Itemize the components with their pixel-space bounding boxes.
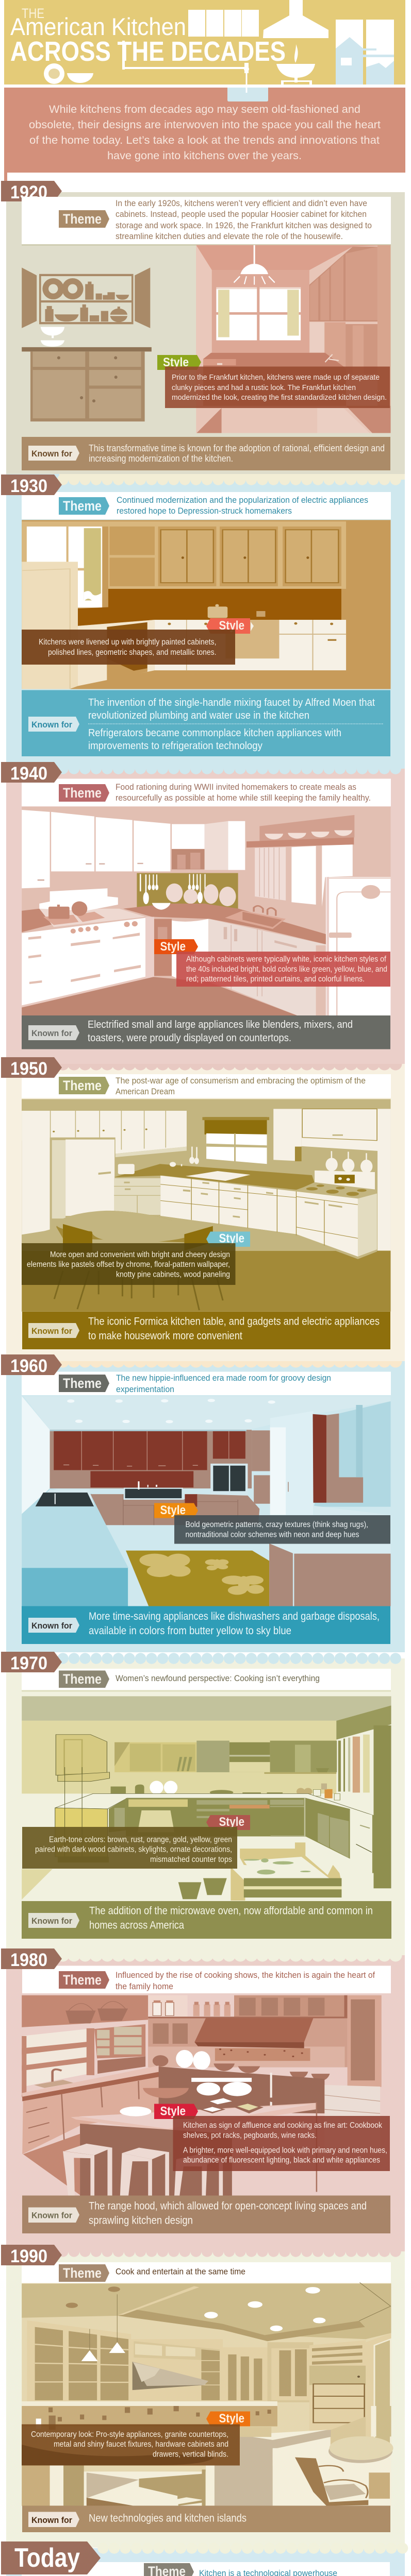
style tag: Style bbox=[160, 940, 186, 954]
known for label: Known for bbox=[31, 720, 72, 730]
style tag bbox=[154, 1503, 198, 1518]
known for label bbox=[28, 1913, 79, 1928]
known for band bbox=[22, 1312, 390, 1349]
style text box: Earth-tone colors: brown, rust, orange, gold, yellow, green bbox=[49, 1835, 232, 1844]
style tag: Style bbox=[219, 2412, 244, 2426]
style text box: mismatched counter tops bbox=[150, 1855, 232, 1864]
icon: range hood bbox=[263, 0, 328, 38]
year tag 1990: 1990 bbox=[10, 2246, 47, 2266]
theme text: The new hippie-influenced era made room for groovy design bbox=[116, 1373, 331, 1383]
panel: 1980 bbox=[1, 1939, 405, 2251]
theme text: restored hope to Depression-struck homemakers bbox=[117, 506, 292, 516]
panel: 1940 bbox=[1, 762, 405, 1060]
scallop edge bbox=[63, 1057, 405, 1071]
known for text: The addition of the microwave oven, now affordable and common in bbox=[89, 1905, 373, 1917]
theme text bbox=[116, 782, 371, 803]
known for label bbox=[28, 717, 79, 732]
theme text: cabinets. Instead, people used the popular Hoosier cabinet for kitchen bbox=[116, 210, 367, 219]
style text box bbox=[165, 367, 390, 408]
year tag 1970 bbox=[1, 1652, 62, 1673]
panel: 1970 bbox=[1, 1652, 405, 1950]
style text box: Prior to the Frankfurt kitchen, kitchens were made up of separate bbox=[172, 374, 380, 382]
known for text bbox=[88, 697, 384, 752]
known for text: homes across America bbox=[89, 1920, 184, 1931]
known for label: Known for bbox=[31, 449, 72, 459]
illustration: 1950s kitchen bbox=[22, 1099, 391, 1312]
style text box: Although cabinets were typically white, iconic kitchen styles of bbox=[186, 955, 387, 963]
style text box: Kitchens were livened up with brightly painted cabinets, bbox=[39, 638, 217, 647]
style text box: the 40s included bright, bold colors like green, yellow, blue, and bbox=[186, 965, 387, 974]
theme tag: Theme bbox=[63, 2265, 102, 2281]
theme text: The post-war age of consumerism and embracing the optimism of the bbox=[116, 1076, 366, 1086]
known for text: revolutionized plumbing and water use in the kitchen bbox=[88, 709, 309, 721]
title: ACROSS THE DECADES bbox=[10, 36, 286, 67]
panel: today bbox=[1, 2541, 405, 2576]
theme tag: Theme bbox=[63, 1376, 102, 1391]
style tag: Style bbox=[160, 1503, 186, 1517]
style tag bbox=[206, 618, 254, 634]
known for text: The range hood, which allowed for open-concept living spaces and bbox=[89, 2200, 367, 2212]
year tag 1980 bbox=[1, 1948, 62, 1970]
theme text: streamline kitchen duties and elevate the role of the housewife. bbox=[116, 232, 343, 241]
style text box: abundance of fluorescent lighting, black and white appliances bbox=[183, 2156, 380, 2165]
known for band bbox=[22, 690, 390, 756]
style text box: knotty pine cabinets, wood paneling bbox=[116, 1270, 230, 1279]
known for text: to make housework more convenient bbox=[88, 1330, 242, 1342]
known for text: increasing modernization of the kitchen. bbox=[89, 453, 233, 464]
style tag bbox=[206, 1231, 250, 1247]
style text box: shelves, pot racks, pegboards, wine racks. bbox=[183, 2131, 317, 2140]
style text box bbox=[176, 952, 390, 987]
known for band bbox=[22, 2196, 390, 2233]
known for text bbox=[88, 1019, 353, 1044]
style tag: Style bbox=[163, 355, 189, 369]
illustration: 1920s kitchen bbox=[196, 245, 391, 433]
year tag 1950 bbox=[1, 1057, 62, 1079]
year tag 1920: 1920 bbox=[10, 182, 47, 202]
theme panel bbox=[22, 779, 391, 806]
scallop edge bbox=[63, 2246, 405, 2257]
intro text: obsolete, their designs are interwoven into the space you call the heart bbox=[29, 118, 381, 131]
intro text: of the home today. Let’s take a look at the trends and innovations that bbox=[29, 134, 380, 146]
known for text: available in colors from butter yellow to sky blue bbox=[89, 1625, 291, 1637]
intro panel bbox=[4, 84, 405, 183]
known for text: toasters, were proudly displayed on countertops. bbox=[88, 1032, 291, 1044]
theme tag: Theme bbox=[63, 785, 102, 801]
year tag 1930: 1930 bbox=[10, 476, 47, 496]
title: American Kitchen bbox=[10, 13, 186, 40]
intro text bbox=[29, 103, 381, 162]
style text box: More open and convenient with bright and cheery design bbox=[50, 1250, 230, 1259]
known for label: Known for bbox=[31, 1621, 72, 1631]
known for label: Known for bbox=[31, 1326, 72, 1336]
theme tag: Theme bbox=[63, 1972, 102, 1988]
icon: pot on burner bbox=[276, 44, 315, 84]
style text box bbox=[22, 630, 235, 665]
style tag bbox=[206, 2411, 250, 2427]
style text box: red; patterned tiles, printed curtains, and colorful linens. bbox=[186, 975, 365, 984]
known for label bbox=[28, 1618, 79, 1633]
known for text bbox=[88, 1316, 380, 1342]
style tag: Style bbox=[160, 2104, 186, 2119]
theme text: resourcefully as possible at home while still keeping the family healthy. bbox=[116, 793, 371, 803]
known for text: New technologies and kitchen islands bbox=[89, 2512, 246, 2524]
theme panel bbox=[22, 1669, 391, 1692]
theme text: Cook and entertain at the same time bbox=[116, 2267, 245, 2276]
theme text: the family home bbox=[116, 1981, 173, 1991]
style tag bbox=[157, 355, 201, 370]
icon: faucet pipe bbox=[122, 41, 249, 88]
style text box: paired with dark wood cabinets, skylights, ornate decorations, bbox=[35, 1845, 232, 1854]
title: THE bbox=[22, 6, 44, 21]
illustration: 1960s kitchen bbox=[22, 1395, 391, 1606]
style text box bbox=[173, 2116, 390, 2171]
style text box: metal and shiny faucet fixtures, hardware cabinets and bbox=[54, 2440, 228, 2449]
known for band bbox=[22, 437, 390, 470]
theme tag: Theme bbox=[63, 211, 102, 227]
year tag 1950: 1950 bbox=[10, 1059, 47, 1079]
illustration: 1940s kitchen bbox=[22, 807, 391, 1015]
icon: window with house bbox=[336, 20, 394, 84]
panel: 1950 bbox=[1, 1057, 405, 1355]
style text box: modernized the look, creating the first standardized kitchen design. bbox=[172, 394, 387, 402]
style tag bbox=[154, 939, 198, 954]
theme text: Food rationing during WWII invited homemakers to create meals as bbox=[116, 782, 356, 792]
known for label: Known for bbox=[31, 2210, 72, 2221]
style tag: Style bbox=[219, 619, 244, 633]
known for text: sprawling kitchen design bbox=[89, 2214, 193, 2227]
scallop edge bbox=[63, 1355, 405, 1367]
style text box: elements like pastels offset by chrome, floral-pattern wallpaper, bbox=[27, 1260, 230, 1269]
style text box: polished lines, geometric shapes, and metallic tones. bbox=[48, 648, 217, 657]
style text box: nontraditional color schemes with neon and deep hues bbox=[186, 1530, 359, 1539]
illustration: 1990s kitchen bbox=[22, 2282, 393, 2506]
theme text: experimentation bbox=[116, 1384, 174, 1394]
theme text: Influenced by the rise of cooking shows, the kitchen is again the heart of bbox=[116, 1970, 375, 1980]
theme tag: Theme bbox=[63, 498, 102, 514]
year tag 1940 bbox=[1, 762, 62, 784]
style text box bbox=[22, 1827, 237, 1869]
illustration: 1930s kitchen bbox=[22, 520, 391, 689]
year tag 1970: 1970 bbox=[10, 1653, 47, 1673]
theme text: In the early 1920s, kitchens weren’t very efficient and didn’t even have bbox=[116, 199, 367, 208]
style tag bbox=[206, 1815, 250, 1830]
style text box: A brighter, more well-equipped look with primary and neon hues, bbox=[183, 2146, 387, 2155]
style tag: Style bbox=[219, 1815, 244, 1829]
theme text bbox=[116, 199, 372, 241]
known for text bbox=[89, 443, 385, 464]
style text box: Kitchen as sign of affluence and cooking as fine art: Cookbook bbox=[183, 2121, 382, 2130]
year tag 1930 bbox=[1, 474, 62, 496]
known for label: Known for bbox=[31, 1916, 72, 1926]
theme text bbox=[117, 495, 368, 516]
known for text: Refrigerators became commonplace kitchen appliances with bbox=[88, 727, 341, 739]
theme text: Women’s newfound perspective: Cooking isn’t everything bbox=[116, 1673, 320, 1683]
icon: water basin bbox=[227, 88, 268, 101]
intro text: have gone into kitchens over the years. bbox=[107, 149, 302, 162]
theme panel bbox=[22, 2562, 390, 2576]
style tag: Style bbox=[219, 1231, 244, 1246]
year tag today: Today bbox=[14, 2543, 80, 2573]
panel: 1960 bbox=[1, 1349, 405, 1652]
theme text bbox=[116, 1076, 366, 1096]
style text box bbox=[174, 1515, 390, 1544]
known for text: Electrified small and large appliances like blenders, mixers, and bbox=[88, 1019, 353, 1030]
illustration: 1980s kitchen bbox=[22, 1995, 391, 2196]
style text box: Contemporary look: Pro-style appliances, granite countertops, bbox=[31, 2430, 228, 2439]
theme panel bbox=[22, 492, 391, 519]
theme text: Continued modernization and the popularization of electric appliances bbox=[117, 495, 368, 505]
year tag 1960: 1960 bbox=[10, 1356, 47, 1376]
theme panel bbox=[22, 1074, 391, 1098]
known for text bbox=[89, 1611, 380, 1637]
known for label bbox=[28, 2512, 79, 2527]
theme panel bbox=[22, 197, 391, 246]
theme text: storage and work space. In 1926, the Frankfurt kitchen was designed to bbox=[116, 221, 372, 230]
year tag 1990 bbox=[1, 2245, 62, 2266]
style text box: Bold geometric patterns, crazy textures (think shag rugs), bbox=[186, 1520, 368, 1529]
known for label bbox=[28, 446, 79, 461]
theme panel bbox=[22, 1966, 391, 1993]
known for label bbox=[28, 1323, 79, 1338]
known for label bbox=[28, 1025, 79, 1040]
style text box bbox=[22, 2425, 240, 2466]
scallop edge bbox=[63, 1653, 405, 1664]
theme tag: Theme bbox=[63, 1671, 102, 1687]
known for text: improvements to refrigeration technology bbox=[88, 740, 263, 752]
known for text bbox=[89, 2200, 367, 2227]
panel: 1920 bbox=[1, 180, 405, 474]
scallop edge bbox=[59, 474, 405, 480]
style tag bbox=[154, 2104, 198, 2119]
year tag 1960 bbox=[1, 1354, 62, 1376]
panel: 1990 bbox=[1, 2245, 405, 2548]
header banner bbox=[4, 0, 405, 88]
scallop edge bbox=[63, 763, 405, 774]
known for label bbox=[28, 2207, 79, 2223]
icon: plate and bowl bbox=[44, 63, 93, 84]
year tag 1940: 1940 bbox=[10, 764, 47, 784]
year tag 1920 bbox=[1, 181, 62, 202]
theme text bbox=[116, 1970, 375, 1991]
style text box: clunky pieces and had a rustic look. The Frankfurt kitchen bbox=[172, 384, 356, 392]
theme panel bbox=[22, 2262, 391, 2283]
known for text: The invention of the single-handle mixing faucet by Alfred Moen that bbox=[88, 697, 375, 708]
scallop edge bbox=[103, 2543, 405, 2554]
theme text: American Dream bbox=[116, 1087, 175, 1096]
known for band bbox=[22, 1015, 390, 1049]
illustration: 1970s kitchen bbox=[22, 1696, 391, 1901]
known for label: Known for bbox=[31, 1028, 72, 1038]
year tag 1980: 1980 bbox=[10, 1950, 47, 1970]
known for text bbox=[89, 1905, 373, 1931]
theme tag: Theme bbox=[63, 1078, 102, 1093]
theme panel bbox=[22, 1371, 391, 1395]
icon: wall cabinets bbox=[188, 10, 259, 37]
known for label: Known for bbox=[31, 2515, 72, 2525]
illustration: Hoosier cabinet bbox=[22, 267, 152, 421]
scallop edge bbox=[63, 1948, 405, 1962]
theme text bbox=[116, 1373, 331, 1394]
known for band bbox=[22, 1901, 391, 1939]
title bbox=[10, 6, 286, 67]
known for band bbox=[22, 1606, 390, 1644]
style text box: drawers, vertical blinds. bbox=[153, 2450, 228, 2459]
known for band bbox=[22, 2506, 390, 2532]
style text box bbox=[22, 1243, 235, 1285]
panel: 1930 bbox=[1, 474, 405, 769]
intro text: While kitchens from decades ago may seem old-fashioned and bbox=[49, 103, 360, 115]
